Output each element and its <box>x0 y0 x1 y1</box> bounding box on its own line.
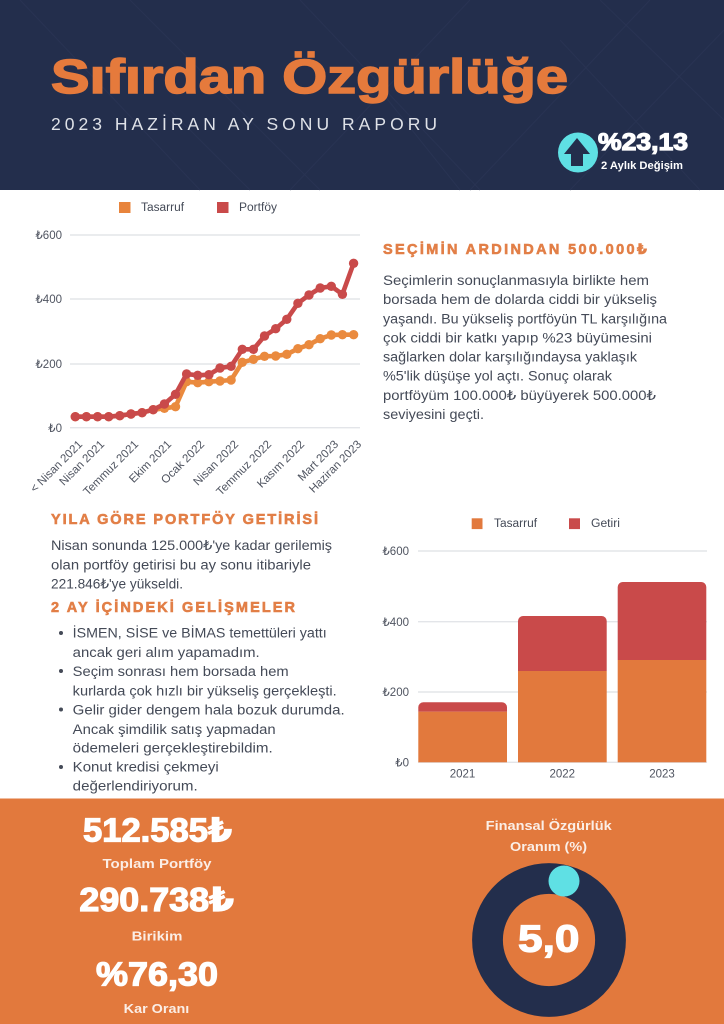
y axis labels: ₺200 <box>382 687 409 699</box>
stat: total portfolio: Toplam Portföy <box>102 856 212 871</box>
y axis labels: ₺600 <box>382 546 409 558</box>
bullet list: Ancak şimdilik satış yapmadan <box>73 722 276 737</box>
text block: yearly return <box>51 511 332 591</box>
x axis labels: 2023 <box>649 769 675 781</box>
bar: 2023 <box>618 582 706 762</box>
bullet list: Gelir gider dengem hala bozuk durumda. <box>73 702 345 717</box>
bar: 2021 <box>418 702 507 762</box>
y axis labels <box>35 230 62 435</box>
y axis labels: ₺400 <box>35 294 62 306</box>
line chart legend: Portföy <box>239 202 277 214</box>
election body: portföyüm 100.000₺ büyüyerek 500.000₺ <box>383 388 657 403</box>
y axis labels: ₺0 <box>395 758 409 770</box>
x axis labels: Nisan 2021 <box>57 439 107 488</box>
election body: borsada hem de dolarda ciddi bir yükseliş <box>383 292 657 307</box>
donut heading: Oranım (%) <box>510 839 587 854</box>
stat: profit rate <box>96 956 218 1016</box>
text block: election <box>383 241 668 422</box>
stat: profit rate: Kar Oranı <box>124 1001 189 1016</box>
bar: 2022 <box>518 616 607 762</box>
donut heading: Finansal Özgürlük <box>486 818 613 833</box>
x axis labels: Temmuz 2022 <box>215 439 274 498</box>
bullet list: Konut kredisi çekmeyi <box>73 760 219 775</box>
stat: total portfolio: 512.585₺ <box>83 812 232 849</box>
yearly return body: Nisan sonunda 125.000₺'ye kadar gerilemiş <box>51 538 332 553</box>
change label: 2 Aylık Değişim <box>601 160 683 172</box>
donut chart <box>488 866 610 1002</box>
series: Tasarruf <box>75 335 354 417</box>
x axis labels: Kasım 2022 <box>255 439 307 491</box>
bullet list: değerlendiriyorum. <box>73 779 198 794</box>
bullet list: ödemeleri gerçekleştirebildim. <box>73 740 273 755</box>
yearly return body: olan portföy getirisi bu ay sonu itibariyle <box>51 557 311 572</box>
subtitle: 2023 HAZİRAN AY SONU RAPORU <box>51 114 437 134</box>
y axis labels: ₺400 <box>382 617 409 629</box>
x axis labels <box>450 769 675 781</box>
x axis labels: 2021 <box>450 769 475 781</box>
bullet list: kurlarda çok hızlı bir yükseliş gerçekleşti. <box>73 684 337 699</box>
line chart legend <box>119 202 277 214</box>
x axis labels: 2022 <box>550 769 575 781</box>
stat: savings: 290.738₺ <box>79 881 234 918</box>
line chart <box>28 202 364 498</box>
panel: header banner <box>0 0 724 190</box>
x axis labels: Haziran 2023 <box>307 439 364 495</box>
election body: çok ciddi bir katkı yapıp %23 büyümesini <box>383 330 652 345</box>
y axis labels <box>382 546 409 770</box>
text block: developments <box>51 599 345 794</box>
x axis labels: Ekim 2021 <box>127 439 174 486</box>
stat: savings: Birikim <box>132 929 182 944</box>
change value: %23,13 <box>598 129 688 156</box>
heading: yearly return: YILA GÖRE PORTFÖY GETİRİSİ <box>51 511 318 528</box>
stat: savings <box>79 881 234 944</box>
series: Portföy <box>75 263 354 417</box>
donut heading <box>486 818 613 854</box>
x axis labels: Nisan 2022 <box>191 439 241 488</box>
donut value: 5,0 <box>518 919 580 961</box>
x axis labels: < Nisan 2021 <box>28 439 85 495</box>
x axis labels: Ocak 2022 <box>159 439 207 486</box>
bullet list: Seçim sonrası hem borsada hem <box>73 664 289 679</box>
line chart legend: Tasarruf <box>141 202 185 214</box>
x axis labels: Mart 2023 <box>296 439 341 484</box>
stat: profit rate: %76,30 <box>96 956 218 993</box>
bar chart legend <box>472 518 620 530</box>
yearly return body <box>51 538 332 591</box>
election body: %5'lik düşüşe yol açtı. Sonuç olarak <box>383 369 612 384</box>
election body <box>383 273 668 422</box>
bar chart legend: Tasarruf <box>494 518 538 530</box>
bar chart legend: Getiri <box>591 518 620 530</box>
bar chart <box>382 518 707 781</box>
heading: election: SEÇİMİN ARDINDAN 500.000₺ <box>383 241 647 258</box>
title: Sıfırdan Özgürlüğe <box>51 51 568 104</box>
x axis labels: Temmuz 2021 <box>82 439 141 498</box>
bullet list: İSMEN, SİSE ve BİMAS temettüleri yattı <box>73 626 327 641</box>
yearly return body: 221.846₺'ye yükseldi. <box>51 576 183 591</box>
icon: up arrow <box>558 132 598 172</box>
election body: Seçimlerin sonuçlanmasıyla birlikte hem <box>383 273 649 288</box>
y axis labels: ₺0 <box>48 423 62 435</box>
y axis labels: ₺600 <box>35 230 62 242</box>
bullet list <box>59 626 345 794</box>
x axis labels <box>28 439 364 498</box>
stat: total portfolio <box>83 812 232 871</box>
y axis labels: ₺200 <box>35 359 62 371</box>
heading: developments: 2 AY İÇİNDEKİ GELİŞMELER <box>51 599 296 616</box>
bullet list: ancak geri alım yapamadım. <box>73 645 260 660</box>
panel: summary footer <box>0 798 724 1024</box>
election body: yaşandı. Bu yükseliş portföyün TL karşılığına <box>383 311 668 326</box>
election body: sağlarken dolar karşılığındaysa yaklaşık <box>383 350 637 365</box>
election body: seviyesini geçti. <box>383 407 484 422</box>
